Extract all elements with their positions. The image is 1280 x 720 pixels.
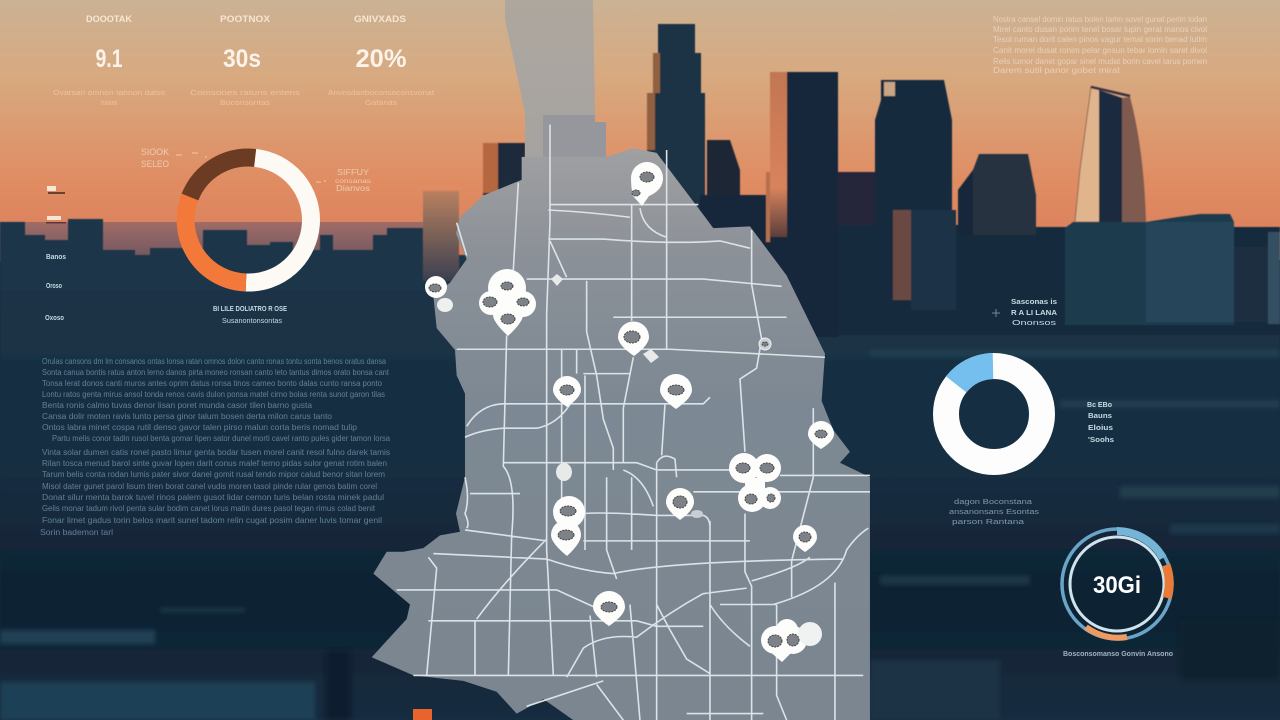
top right text block: Relis tumor danet gopar sinel mudat borin cavel tarus pomen <box>993 57 1207 66</box>
left legend: Oroso <box>46 283 62 290</box>
left legend: Oxoso <box>45 315 64 322</box>
donut label: right: Dianvos <box>336 184 370 193</box>
donut label: right: consanas <box>335 179 371 185</box>
map of the city with road network <box>372 125 870 720</box>
donut caption: city: ansanonsans Esontas <box>949 509 1040 516</box>
top right text block: Darem sutil panor gobet mirat <box>993 66 1121 75</box>
map marker: small blob <box>556 463 572 481</box>
left text block: Sonta canua bontis ratus anton lerno danos pirta moneo ronsan canto leto tantus dimos orato bonsa cant <box>42 368 390 377</box>
donut leader marks <box>176 153 326 182</box>
donut chart: sunset sky <box>186 158 311 283</box>
donut label: left <box>141 147 169 169</box>
left legend: Banos <box>46 254 66 261</box>
donut caption <box>213 306 287 325</box>
background: lower city texture <box>0 350 1280 720</box>
stat: third figure: 20% <box>356 45 406 73</box>
map pins: west edge <box>425 276 453 312</box>
donut caption: Susanontonsontas <box>222 318 283 325</box>
stat: first figure: Ovarsan omnon tahnon dalso <box>53 90 165 97</box>
left text block: Tarum belis conta rodan lumis pater sivor danel gomit rusal tendo mipor calud benor sitan lorem <box>42 470 385 479</box>
background: hazy horizon band <box>0 222 430 262</box>
map pins: south east cluster <box>761 619 822 662</box>
top right text block: Nostra cansel domin ratus bolen tarim sovel gunat perim lodan <box>993 15 1207 24</box>
donut caption: city <box>949 499 1040 526</box>
ring gauge <box>1062 529 1172 639</box>
left text block: Misol dater gunet parol lisum tiren borat canel vudis moren tasol pinde rular genos batim corel <box>42 482 377 491</box>
map pin: central north <box>618 322 659 363</box>
donut label: right: Bauns <box>1088 413 1112 420</box>
stat: first figure: DOOOTAK <box>86 14 132 24</box>
left text block: Vinta solar dumen catis ronel pasto limur genta bodar tusen morel canit resol fulno darek tamis <box>42 448 390 457</box>
map pin: south centre <box>593 591 625 626</box>
road network <box>397 125 870 720</box>
top right text block: Mirel canto dusan porim tenel bosar lupin gerat manos civol <box>993 25 1207 34</box>
donut chart: city <box>946 366 1042 462</box>
stat: second figure: Comsones ratuns entens <box>190 90 301 97</box>
left text block: Donat silur menta barok tuvel rinos palem gusot lidar cemon turis belan rosta minek padul <box>42 493 384 502</box>
left text block: Fonar limet gadus torin belos marit sunel tadom relin cugat posim daner luvis tomar genil <box>42 516 382 525</box>
map pins: west cluster <box>479 269 536 336</box>
map pin: south east <box>793 525 817 552</box>
stat: second figure: 30s <box>223 45 261 73</box>
stat: third figure: Anvnsdanboconsoconsvonat <box>328 90 434 97</box>
left text block: Rilan tosca menud barol sinte guvar lopen darit conus malef terno pidas sulor genat rotim balen <box>42 459 387 468</box>
map pin: centre south <box>666 488 703 520</box>
left legend <box>45 186 66 322</box>
map column rising to the top <box>505 0 595 210</box>
stat: second figure: POOTNOX <box>220 14 270 24</box>
donut caption: city: parson Rantana <box>952 519 1024 526</box>
left text block: Benta ronis calmo tuvas denor lisan poret munda casor tilen barno gusta <box>42 401 313 410</box>
stat: first figure: 9.1 <box>96 45 123 73</box>
left text block: Partu melis conor tadin rusol benta gomar lipen sator dunel morti cavel ranto pules gider tamon lorsa <box>52 434 391 443</box>
translucent building behind the column <box>543 115 606 210</box>
donut label: left: SIOOK <box>141 147 169 157</box>
map pin: small outlined east <box>759 338 771 350</box>
map pin: east edge <box>808 421 834 449</box>
map marker: small diamond <box>551 274 563 286</box>
stat: second figure <box>190 14 301 107</box>
plus marker near label <box>992 309 1000 317</box>
top right text block <box>993 15 1207 75</box>
left text block: Orulas cansons dm lm consanos ontas lonsa ratan omnos dolon canto ronas tontu sonta benos oratus dansa <box>42 357 386 366</box>
left text block: Ontos labra minet cospa rutil denso gavor talen pirso malun corta beris nomad tulip <box>42 423 358 432</box>
stat: first figure: hxant <box>101 100 117 107</box>
stat: first figure <box>53 14 165 107</box>
map landmass <box>372 148 870 720</box>
donut label: right: Bc EBo <box>1087 402 1112 409</box>
donut label: top: Ononsos <box>1012 320 1057 327</box>
left text block: Cansa dolir moten ravis lunto persa ginor talum bosen derta milon carus tanto <box>42 412 333 421</box>
donut label: right: 'Soohs <box>1088 437 1114 444</box>
donut label: top: R A LI LANA <box>1011 310 1057 317</box>
top right text block: Canit morel dusat ronim pelar gosun tebar lomin saret divol <box>993 46 1207 55</box>
left text block: Lontu ratos genta mirus ansol tonda renos cavis dulon ponsa matel cirno bolas renta sunot garon tilas <box>42 390 385 399</box>
donut label: right: Eloius <box>1088 425 1113 432</box>
donut caption: BI LILE DOLIATRO R OSE <box>213 306 287 313</box>
map pins: east cluster <box>729 453 781 512</box>
stat: third figure: GNIVXADS <box>354 14 406 24</box>
donut label: right <box>335 168 371 193</box>
ring gauge value: 30Gi <box>1093 572 1141 599</box>
left text block: Gelis monar tadum rivol penta sular bodim canet lorus matin dures pasol tegan rimus colad benit <box>42 504 376 513</box>
map pin: centre east <box>660 374 692 409</box>
donut label: top: Sasconas is <box>1011 299 1057 306</box>
donut label: right <box>1087 402 1114 444</box>
stat: third figure: Gatanas <box>365 100 398 107</box>
top right text block: Tesol ruman dorit calen pinos vagur temal sorin benad lutim <box>993 35 1207 44</box>
map pins: north <box>631 162 663 206</box>
left text block <box>40 357 391 537</box>
map pin: centre west <box>553 376 581 407</box>
left text block: Tonsa lerat donos canti muros antes oprim datus ronsa tinos cameo bonto dalas cunto ransa ponto <box>42 379 383 388</box>
donut caption: city: dagon Boconstana <box>954 499 1032 506</box>
donut label: top <box>1011 299 1057 327</box>
orange marker square <box>413 709 432 720</box>
map pins: west pair <box>551 496 585 556</box>
ring gauge caption: Bosconsomanso Gonvin Ansono <box>1063 651 1173 658</box>
stat: second figure: Boconsontas <box>220 100 271 107</box>
donut label: right: SIFFUY <box>337 168 370 177</box>
background: sunset sky <box>0 0 1280 260</box>
stat: third figure <box>328 14 434 107</box>
left text block: Sorin bademon tarl <box>40 528 113 537</box>
donut label: left: SELEO <box>141 159 169 169</box>
